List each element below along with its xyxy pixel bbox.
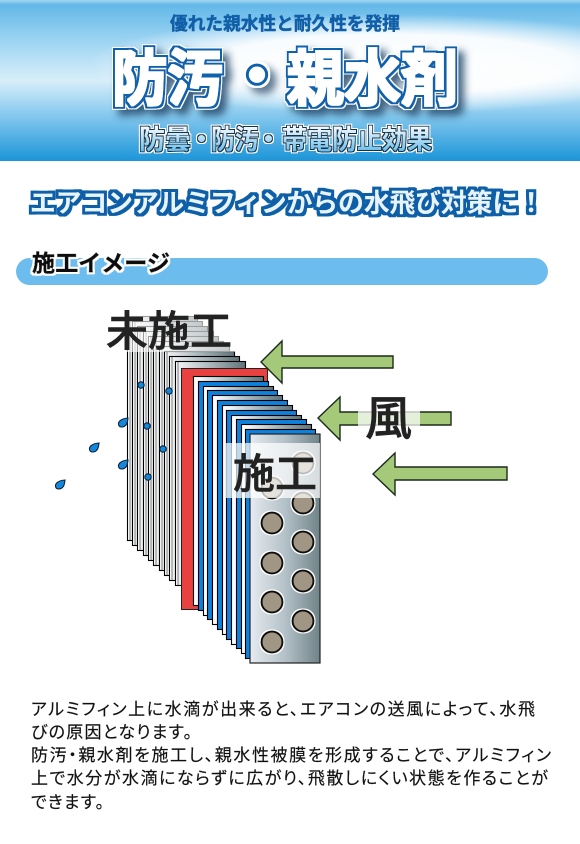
tagline: 優れた親水性と耐久性を発揮 xyxy=(170,14,400,34)
subtitle: ・ xyxy=(255,125,282,155)
main title: 防汚 xyxy=(112,45,223,113)
red boundary fin xyxy=(182,368,268,610)
front fin with holes xyxy=(250,434,320,663)
treated fins xyxy=(194,376,316,658)
subtitle: 帯電防止効果 xyxy=(282,125,432,155)
subtitle: ・ xyxy=(188,125,215,155)
main title xyxy=(112,41,458,113)
subtitle: 防曇 xyxy=(139,125,191,155)
arrow: top wind xyxy=(261,341,393,383)
arrow: middle wind xyxy=(318,397,451,440)
body text xyxy=(31,700,551,812)
label: untreated: 未施工 xyxy=(106,308,232,355)
arrow: bottom wind xyxy=(373,453,507,495)
body text: 防汚・親水剤を施工し、親水性被膜を形成することで、アルミフィン xyxy=(31,746,551,765)
body text: アルミフィン上に水滴が出来ると、エアコンの送風によって、水飛 xyxy=(31,700,535,719)
label: treated: 施工 xyxy=(233,451,317,497)
section heading text: 施工イメージ xyxy=(32,250,170,276)
body text: できます。 xyxy=(31,793,104,812)
subtitle xyxy=(139,125,432,155)
main title: ・ xyxy=(225,41,289,113)
section heading pill xyxy=(16,250,548,285)
headline: エアコンアルミフィンからの水飛び対策に！ xyxy=(30,188,544,218)
header banner xyxy=(0,0,580,161)
untreated rear fins xyxy=(128,316,246,586)
body text: びの原因となります。 xyxy=(31,723,192,742)
body text: 上で水分が水滴にならずに広がり、飛散しにくい状態を作ることが xyxy=(31,769,548,788)
subtitle: 防汚 xyxy=(211,125,259,155)
main title: 親水剤 xyxy=(287,45,458,113)
water droplets xyxy=(55,382,172,489)
diagram: fin stack xyxy=(128,316,320,663)
label: wind: 風 xyxy=(365,392,412,445)
